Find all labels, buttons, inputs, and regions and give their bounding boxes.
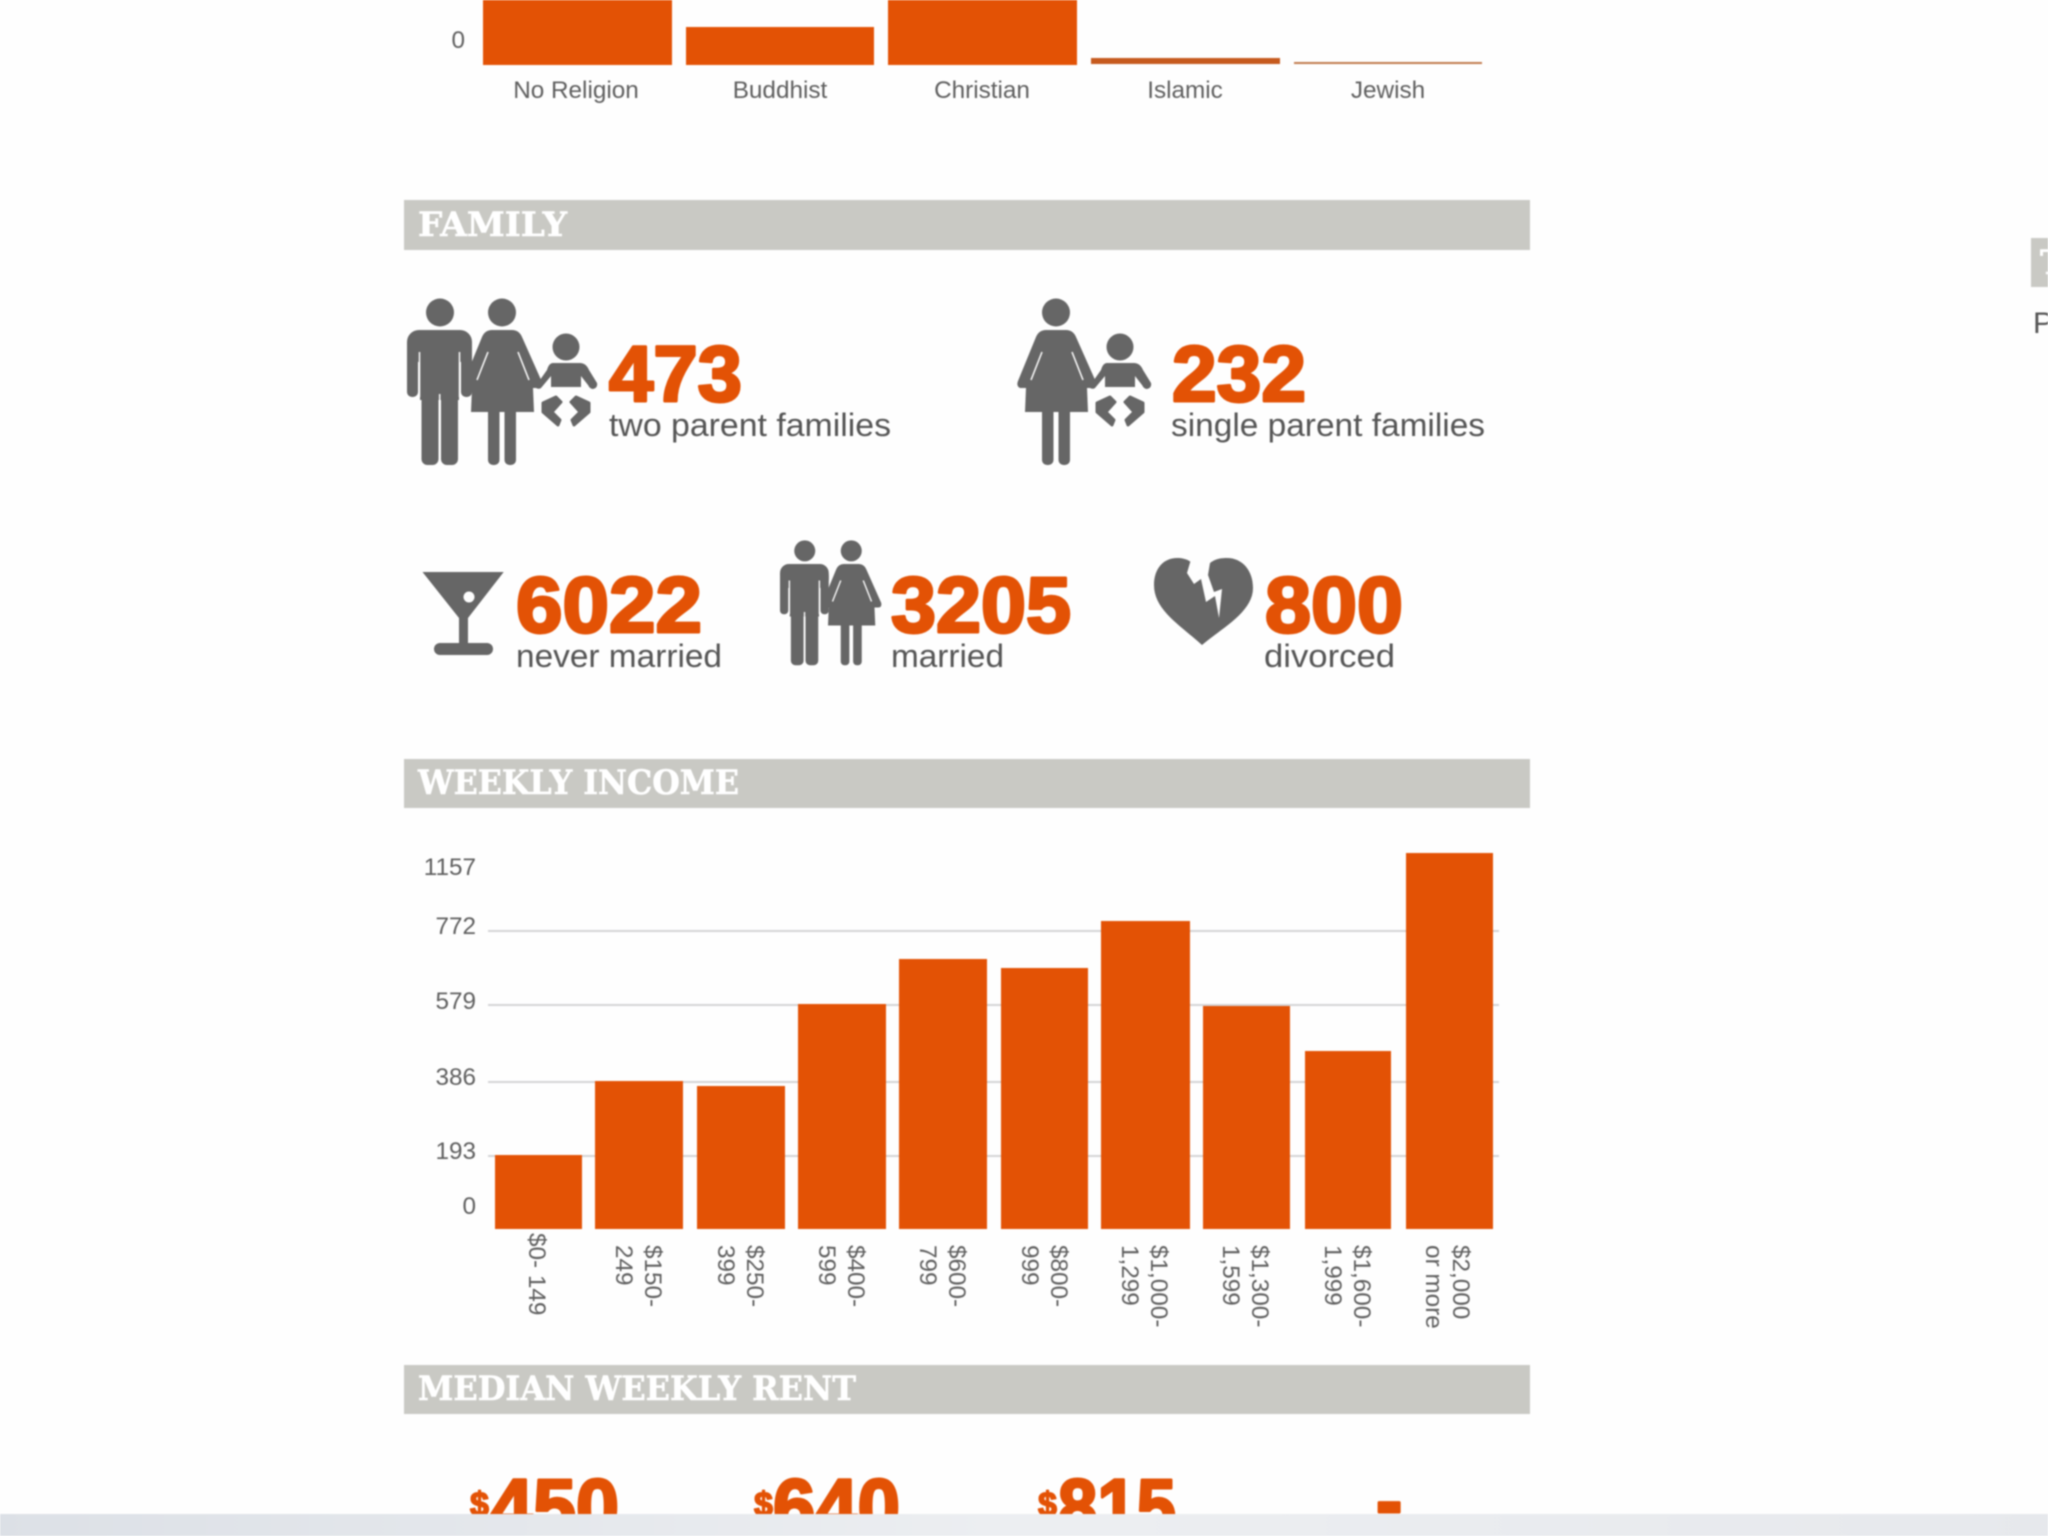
category label: Christian: Christian (934, 77, 1030, 104)
category label: Jewish: Jewish (1351, 77, 1425, 104)
number: 6022: 6022 (516, 560, 702, 649)
y axis labels: 386 (435, 1064, 476, 1091)
bar: Jewish (1294, 62, 1482, 64)
y axis labels: 0 (462, 1193, 476, 1220)
heading bar: weekly income (404, 759, 1530, 808)
stat: divorced (1154, 556, 1403, 674)
icon: couple (780, 540, 881, 665)
y axis labels (424, 854, 476, 1220)
category label: No Religion: No Religion (513, 77, 639, 104)
icon: two parents and child (407, 298, 597, 465)
bar chart: weekly income (424, 853, 1499, 1329)
income range labels: 1,599 (1217, 1245, 1244, 1306)
y axis labels: 579 (435, 988, 476, 1015)
income range labels: $1,300- (1246, 1245, 1273, 1327)
income range labels: 1,299 (1116, 1245, 1143, 1306)
category label: Islamic: Islamic (1147, 77, 1223, 104)
income range labels: 249 (610, 1245, 637, 1286)
income range labels: 599 (813, 1245, 840, 1286)
icon: martini glass (422, 572, 504, 655)
caption: divorced: divorced (1264, 638, 1395, 674)
bar chart: religion (451, 0, 1482, 104)
heading bar: family (404, 200, 1530, 250)
stat: single parent families (1017, 298, 1485, 465)
icon: single parent and child (1017, 298, 1151, 465)
income range labels: $2,000 (1447, 1245, 1474, 1319)
y axis labels: 772 (435, 913, 476, 940)
heading bar: median weekly rent: MEDIAN WEEKLY RENT (418, 1369, 856, 1409)
stat: never married (422, 560, 722, 674)
number: 473: 473 (609, 329, 742, 418)
bar: No Religion (483, 0, 672, 65)
icon: broken heart (1154, 556, 1253, 645)
rent: 640: $ (754, 1486, 773, 1524)
y axis labels: 1157 (424, 854, 476, 881)
number: 3205: 3205 (891, 560, 1071, 649)
income bars (495, 853, 1493, 1229)
next column fragment at right edge (2031, 238, 2048, 340)
caption: never married: never married (516, 638, 722, 674)
income range labels: $800- (1045, 1245, 1072, 1307)
stat: two parent families (407, 298, 891, 465)
bar: Islamic (1091, 58, 1280, 64)
heading bar: weekly income: WEEKLY INCOME (417, 763, 739, 803)
rent: 450: $ (470, 1486, 489, 1524)
axis label: zero: 0 (451, 27, 465, 54)
income range labels: 799 (914, 1245, 941, 1286)
income range labels: $250- (741, 1245, 768, 1307)
income range labels (523, 1233, 1474, 1329)
income range labels: $1,600- (1348, 1245, 1375, 1327)
number: 800: 800 (1265, 560, 1403, 649)
bottom band (0, 1514, 2048, 1536)
y axis labels: 193 (435, 1138, 476, 1165)
rent figures, clipped by the bottom band (470, 1456, 1402, 1536)
income range labels: or more (1420, 1245, 1447, 1329)
heading bar: median weekly rent (404, 1365, 1530, 1414)
number: 232: 232 (1172, 329, 1306, 418)
income range labels: $150- (639, 1245, 666, 1307)
income range labels: 399 (712, 1245, 739, 1286)
rent: 815: $ (1038, 1486, 1057, 1524)
bar: Christian (888, 0, 1077, 65)
heading bar: family: FAMILY (418, 205, 568, 245)
income range labels: 1,999 (1319, 1245, 1346, 1306)
caption: married: married (891, 638, 1004, 674)
income range labels: $400- (842, 1245, 869, 1307)
income range labels: $0- 149 (523, 1233, 550, 1315)
bar: Buddhist (686, 27, 874, 65)
caption: two parent families: two parent families (609, 407, 891, 443)
category label: Buddhist: Buddhist (733, 77, 828, 104)
income range labels: $1,000- (1145, 1245, 1172, 1327)
caption: single parent families: single parent families (1171, 407, 1485, 443)
income range labels: 999 (1016, 1245, 1043, 1286)
stat: married (780, 540, 1071, 674)
income range labels: $600- (943, 1245, 970, 1307)
